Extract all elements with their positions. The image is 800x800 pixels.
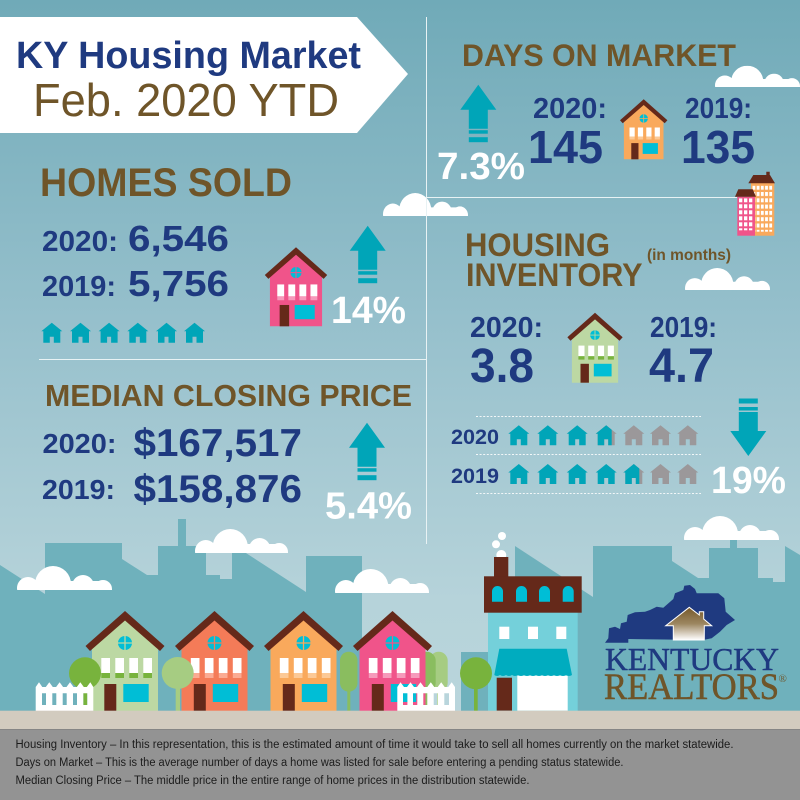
door xyxy=(497,678,512,711)
title line 1: KY Housing Market xyxy=(16,35,361,77)
logo house xyxy=(666,607,712,640)
panel: homes sold xyxy=(40,161,406,343)
homes sold 2020: 6,546 xyxy=(128,218,229,259)
change: 19%: 19% xyxy=(711,460,786,502)
definition: days on market: Days on Market – This is the average number of days a home was listed for sale before entering a pending status statewide. xyxy=(16,757,624,769)
right picket fence xyxy=(397,682,455,711)
back trees xyxy=(340,652,448,711)
tree: dark green xyxy=(69,657,101,711)
icon row: six houses xyxy=(41,323,205,343)
inventory 2019: 4.7 xyxy=(649,340,714,393)
house: pink xyxy=(353,611,432,711)
title line 2: Feb. 2020 YTD xyxy=(33,74,339,126)
tree: green by shop xyxy=(460,657,492,711)
median price 2019: $158,876 xyxy=(134,468,302,511)
heading: housing inventory: HOUSING xyxy=(465,227,610,263)
arrow: up xyxy=(350,226,386,283)
days 2020 xyxy=(528,93,607,173)
arrow: up xyxy=(460,85,496,142)
row: 2019 houses xyxy=(452,464,698,484)
shop upper storey xyxy=(484,576,582,613)
inventory 2020 xyxy=(470,312,543,393)
clouds xyxy=(17,66,800,605)
homes sold 2019: 2019: xyxy=(42,271,116,303)
Kentucky state shape xyxy=(605,585,735,643)
panel: housing inventory xyxy=(451,227,786,502)
arrow: up xyxy=(349,423,385,480)
storefront building xyxy=(484,532,582,711)
row: 2020 houses: 2020 xyxy=(451,426,499,449)
tree: light green xyxy=(162,657,194,711)
homes sold 2019: 5,756 xyxy=(128,263,229,304)
inventory 2020: 3.8 xyxy=(470,340,534,393)
median price 2020 xyxy=(42,422,302,465)
house: coral xyxy=(175,611,254,711)
heading: housing inventory: INVENTORY xyxy=(466,257,642,293)
heading: median closing price: MEDIAN CLOSING PRICE xyxy=(45,378,412,413)
ground strip xyxy=(0,711,800,729)
wordmark: ® xyxy=(778,673,787,685)
row: 2020 houses xyxy=(452,425,698,446)
divider lines xyxy=(39,17,737,544)
wordmark: KENTUCKY xyxy=(605,641,779,677)
smoke xyxy=(492,532,506,560)
wordmark xyxy=(604,641,787,707)
unit note: (in months) xyxy=(647,247,731,264)
chimney xyxy=(494,557,508,577)
awning xyxy=(494,649,572,676)
Kentucky Realtors logo xyxy=(604,585,787,707)
house: green xyxy=(86,611,164,711)
footer definitions xyxy=(0,729,800,800)
icon: pink house xyxy=(265,247,327,326)
days 2020: 145 xyxy=(528,121,603,173)
dotted rules xyxy=(476,416,701,494)
definition: housing inventory: Housing Inventory – In this representation, this is the estimated amount of time it would take to sell all homes currently on the market statewide. xyxy=(16,739,734,751)
definition: median closing price: Median Closing Price – The middle price in the entire range of home prices in the distribution statewide. xyxy=(16,775,530,787)
arrow: down xyxy=(730,398,766,456)
panel: median closing price xyxy=(42,378,412,528)
inventory 2019: 2019: xyxy=(650,312,717,344)
median price 2019: 2019: xyxy=(42,474,115,505)
median price 2019 xyxy=(42,468,302,511)
panel: days on market xyxy=(437,37,755,188)
days 2019 xyxy=(681,93,755,173)
icon: green house xyxy=(567,313,623,383)
inventory 2020: 2020: xyxy=(470,312,543,344)
change: 14%: 14% xyxy=(331,290,406,332)
change: 5.4%: 5.4% xyxy=(325,486,412,528)
days 2019: 135 xyxy=(681,121,755,173)
wordmark: REALTORS xyxy=(604,666,779,707)
shop body xyxy=(488,612,578,711)
inventory 2019 xyxy=(649,312,717,393)
homes sold 2020: 2020: xyxy=(42,226,118,258)
heading: housing inventory xyxy=(465,227,642,293)
row of houses xyxy=(86,611,432,711)
median price 2020: 2020: xyxy=(42,428,116,459)
title banner xyxy=(0,17,408,133)
house: orange xyxy=(264,611,343,711)
icon: apartment buildings xyxy=(735,172,775,236)
days 2020: 2020: xyxy=(533,93,607,125)
days 2019: 2019: xyxy=(685,93,752,125)
homes sold 2019 xyxy=(42,263,229,304)
heading: days on market: DAYS ON MARKET xyxy=(462,37,736,73)
arched windows xyxy=(492,586,574,602)
median price 2020: $167,517 xyxy=(134,422,302,465)
homes sold 2020 xyxy=(42,218,229,259)
change: 7.3%: 7.3% xyxy=(437,146,525,188)
skyline xyxy=(0,519,800,711)
square windows xyxy=(499,627,566,639)
left picket fence xyxy=(36,682,93,711)
row: 2019 houses: 2019 xyxy=(451,465,499,488)
shop window xyxy=(517,676,568,711)
heading: homes sold: HOMES SOLD xyxy=(40,161,292,205)
icon: orange house xyxy=(620,99,667,159)
